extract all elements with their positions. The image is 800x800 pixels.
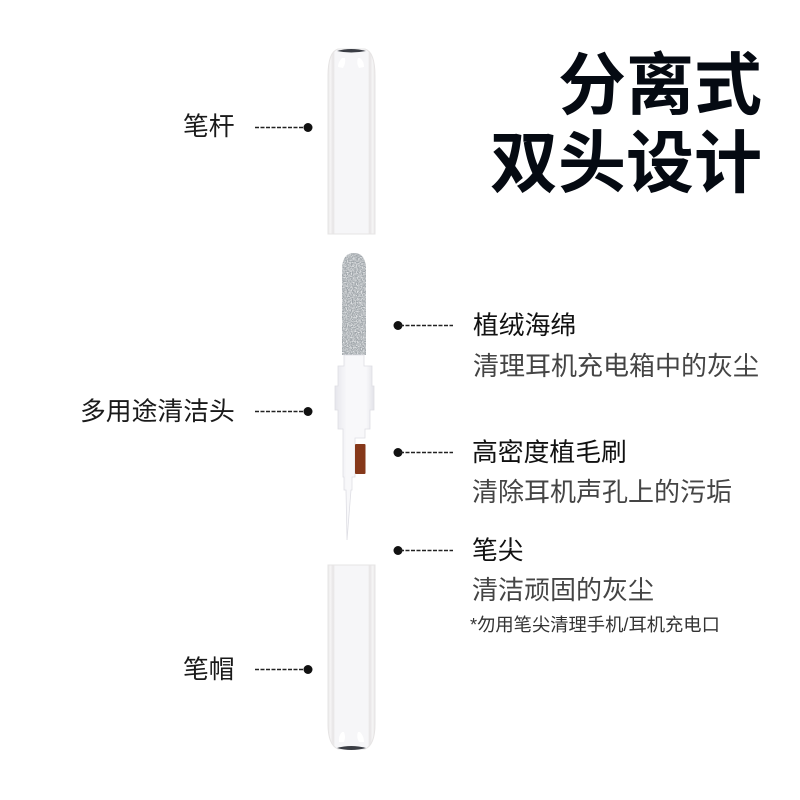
label: barrel: 笔杆 [183, 113, 235, 141]
text block: brush [472, 439, 732, 507]
text block: sponge [473, 312, 759, 381]
label: cleaning head: 多用途清洁头 [80, 398, 235, 426]
title: 分离式 [558, 48, 762, 124]
sponge description: 清理耳机充电箱中的灰尘 [473, 351, 759, 381]
tip warning note: *勿用笔尖清理手机/耳机充电口 [470, 614, 720, 635]
multi-purpose cleaning head [335, 253, 374, 540]
leader line: cap [255, 665, 312, 674]
leader line: sponge [394, 321, 453, 330]
tip description: 清洁顽固的灰尘 [472, 575, 654, 605]
brown bristle brush [355, 444, 366, 474]
text block: tip [470, 537, 720, 635]
leader line: cleaning head [255, 407, 312, 416]
sponge heading: 植绒海绵 [473, 312, 576, 340]
tip heading: 笔尖 [472, 537, 524, 565]
pen cap tube [328, 565, 375, 750]
leader line: tip [394, 546, 453, 555]
grey flocked sponge [342, 253, 366, 355]
brush heading: 高密度植毛刷 [472, 439, 627, 467]
white collar [335, 355, 374, 540]
title: 双头设计 [490, 126, 762, 202]
leader line: brush [394, 448, 453, 457]
leader line: barrel [255, 123, 312, 132]
label: cap: 笔帽 [183, 656, 235, 684]
brush description: 清除耳机声孔上的污垢 [472, 477, 732, 507]
pen barrel tube [328, 49, 375, 234]
title [490, 48, 762, 202]
